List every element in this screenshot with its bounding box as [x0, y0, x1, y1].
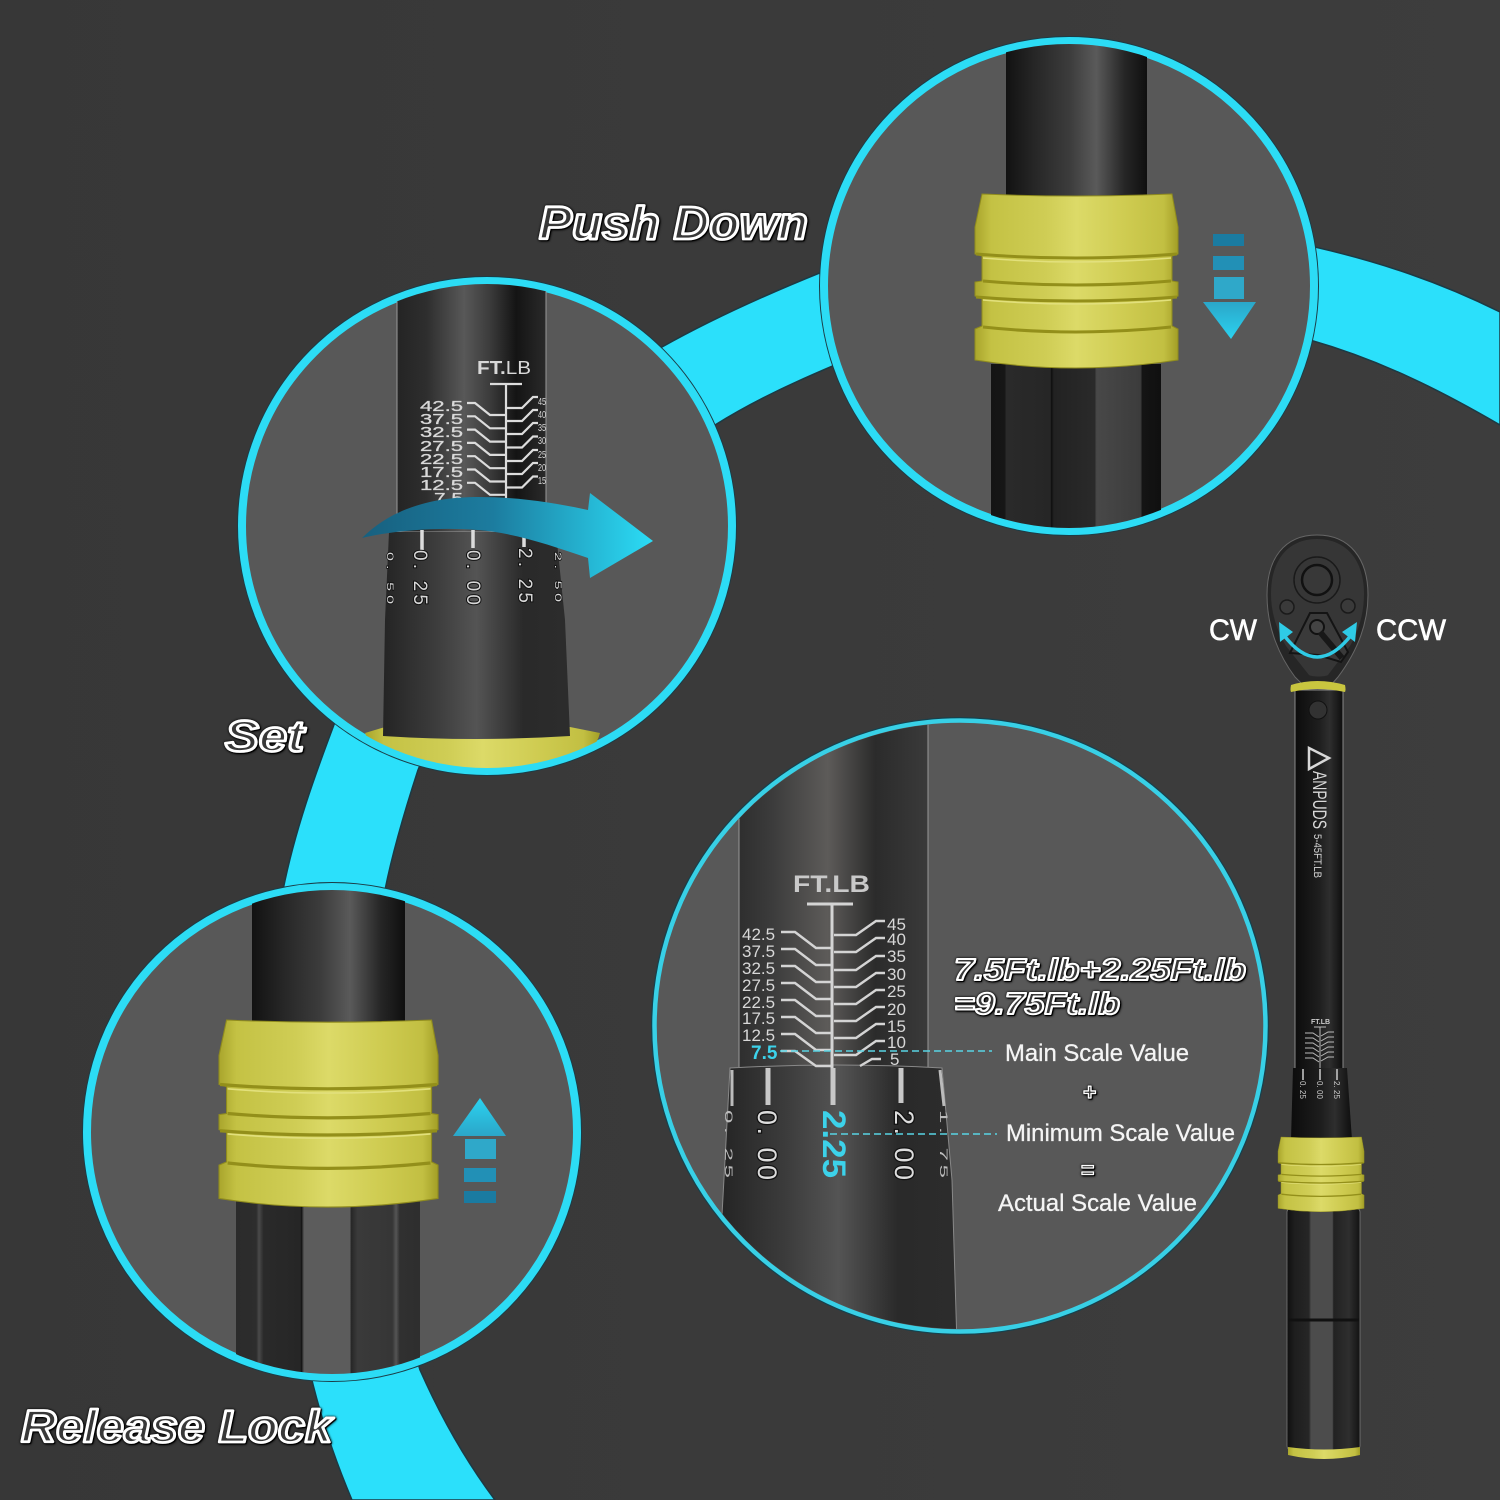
scale text: 40 — [538, 410, 546, 421]
lower grip — [991, 364, 1161, 536]
unit label: FT.LB — [793, 871, 870, 898]
left scale numbers: 32.5 — [742, 959, 775, 978]
handle shaft — [1295, 690, 1343, 1075]
brand logo: ANPUDS — [1308, 771, 1329, 829]
scale text: 32.5 — [420, 424, 463, 441]
mini scale: FT.LB — [1311, 1019, 1330, 1026]
collar numbers: 2. 00 — [889, 1110, 919, 1180]
scale lines — [732, 904, 944, 1106]
minimum scale dashed leader — [830, 1133, 997, 1135]
scale text: 30 — [538, 436, 546, 447]
right scale numbers: 10 — [887, 1033, 906, 1052]
icon: up arrow — [453, 1098, 506, 1203]
upper handle — [1006, 30, 1147, 196]
mini collar numbers — [1298, 1069, 1341, 1100]
left scale numbers: 27.5 — [742, 976, 775, 995]
scale text: 22.5 — [420, 451, 463, 468]
text: minimum scale value: Minimum Scale Value — [1006, 1120, 1235, 1147]
panel: push down — [819, 30, 1319, 536]
mini skirt — [1291, 1068, 1352, 1140]
collar numbers: 0. 00 — [752, 1110, 782, 1180]
collar numbers — [723, 1110, 950, 1180]
text: plus: + — [1083, 1079, 1096, 1105]
text: actual scale value: Actual Scale Value — [998, 1190, 1197, 1217]
scale text: FT.LB — [477, 358, 531, 378]
right scale numbers: 45 — [887, 915, 906, 934]
scale text: 2. 50 — [553, 552, 564, 602]
right scale numbers: 15 — [887, 1017, 906, 1036]
mini scale — [1305, 1019, 1334, 1068]
formula — [954, 952, 1246, 1021]
left scale numbers: 7.5 — [751, 1043, 778, 1064]
tick lines — [422, 384, 538, 550]
wrench head — [1267, 535, 1368, 685]
scale text: 0. 00 — [462, 550, 483, 605]
full wrench — [1267, 535, 1368, 1459]
mini collar — [1278, 1137, 1364, 1212]
lower grip — [236, 1200, 420, 1380]
left scale numbers: 37.5 — [742, 942, 775, 961]
left scale numbers: 22.5 — [742, 993, 775, 1012]
scale text: 27.5 — [420, 438, 463, 455]
right scale numbers: 20 — [887, 1000, 906, 1019]
tube skirt — [720, 1065, 957, 1345]
panel: release lock — [82, 880, 582, 1382]
release button — [1309, 701, 1327, 719]
gold ring — [1290, 681, 1346, 692]
left scale numbers — [742, 925, 778, 1064]
right scale numbers: 35 — [887, 947, 906, 966]
scale text: 45 — [538, 397, 546, 408]
scale text: 35 — [538, 423, 546, 434]
scale text: 42.5 — [420, 398, 463, 415]
right scale numbers: 30 — [887, 965, 906, 984]
mini grip — [1287, 1208, 1360, 1450]
scale text: 2. 25 — [514, 548, 535, 603]
panel: scale reading — [651, 715, 1269, 1345]
label: ccw: CCW — [1376, 614, 1447, 647]
heading: set: Set — [225, 712, 307, 761]
scale text: 7.5 — [434, 490, 463, 507]
heading: release lock: Release Lock — [21, 1401, 334, 1452]
gold disc — [365, 727, 600, 768]
text: main scale value: Main Scale Value — [1005, 1040, 1189, 1067]
scale text: 0. 50 — [385, 552, 396, 604]
formula: =9.75Ft.lb — [954, 986, 1120, 1021]
scale text: 17.5 — [420, 464, 463, 481]
left scale numbers: 12.5 — [742, 1026, 775, 1045]
upper tube — [397, 270, 546, 532]
tube skirt — [383, 532, 570, 739]
collar numbers: 2.25 — [816, 1110, 852, 1178]
scale text: 25 — [538, 450, 546, 461]
mini collar numbers: 0. 00 — [1315, 1081, 1324, 1100]
upper handle — [252, 880, 405, 1022]
icon: down arrow — [1203, 234, 1256, 339]
left scale numbers: 42.5 — [742, 925, 775, 944]
label: cw: CW — [1209, 614, 1258, 647]
gold collar — [975, 194, 1178, 368]
right scale numbers: 25 — [887, 982, 906, 1001]
scale text: 0. 25 — [409, 550, 430, 605]
scale text: 37.5 — [420, 411, 463, 428]
right scale numbers: 5 — [890, 1050, 899, 1069]
upper tube — [739, 715, 928, 1070]
scale text: 12.5 — [420, 477, 463, 494]
scale text: 20 — [538, 463, 546, 474]
heading: push down: Push Down — [539, 197, 808, 249]
scale text — [385, 358, 564, 605]
icon: rotate arrow — [362, 493, 653, 578]
left scale numbers: 17.5 — [742, 1009, 775, 1028]
end cap — [1288, 1447, 1360, 1459]
scale text: 15 — [538, 476, 546, 487]
text: equals: = — [1081, 1157, 1094, 1183]
panel: set — [237, 270, 737, 776]
collar numbers: 1. 75 — [938, 1110, 950, 1178]
gold collar — [219, 1020, 438, 1207]
brand logo — [1308, 748, 1329, 878]
right scale numbers — [887, 915, 906, 1069]
formula: 7.5Ft.lb+2.25Ft.lb — [954, 952, 1246, 987]
mini collar numbers: 2. 25 — [1332, 1081, 1341, 1100]
connecting ribbon — [272, 218, 1500, 1500]
icon: direction arrows — [1279, 622, 1357, 657]
right scale numbers: 40 — [887, 930, 906, 949]
collar numbers: 0. 25 — [723, 1110, 735, 1178]
mini collar numbers: 0. 25 — [1298, 1081, 1307, 1100]
brand logo: 5-45FT.LB — [1311, 834, 1323, 878]
main scale dashed leader — [780, 1050, 992, 1052]
